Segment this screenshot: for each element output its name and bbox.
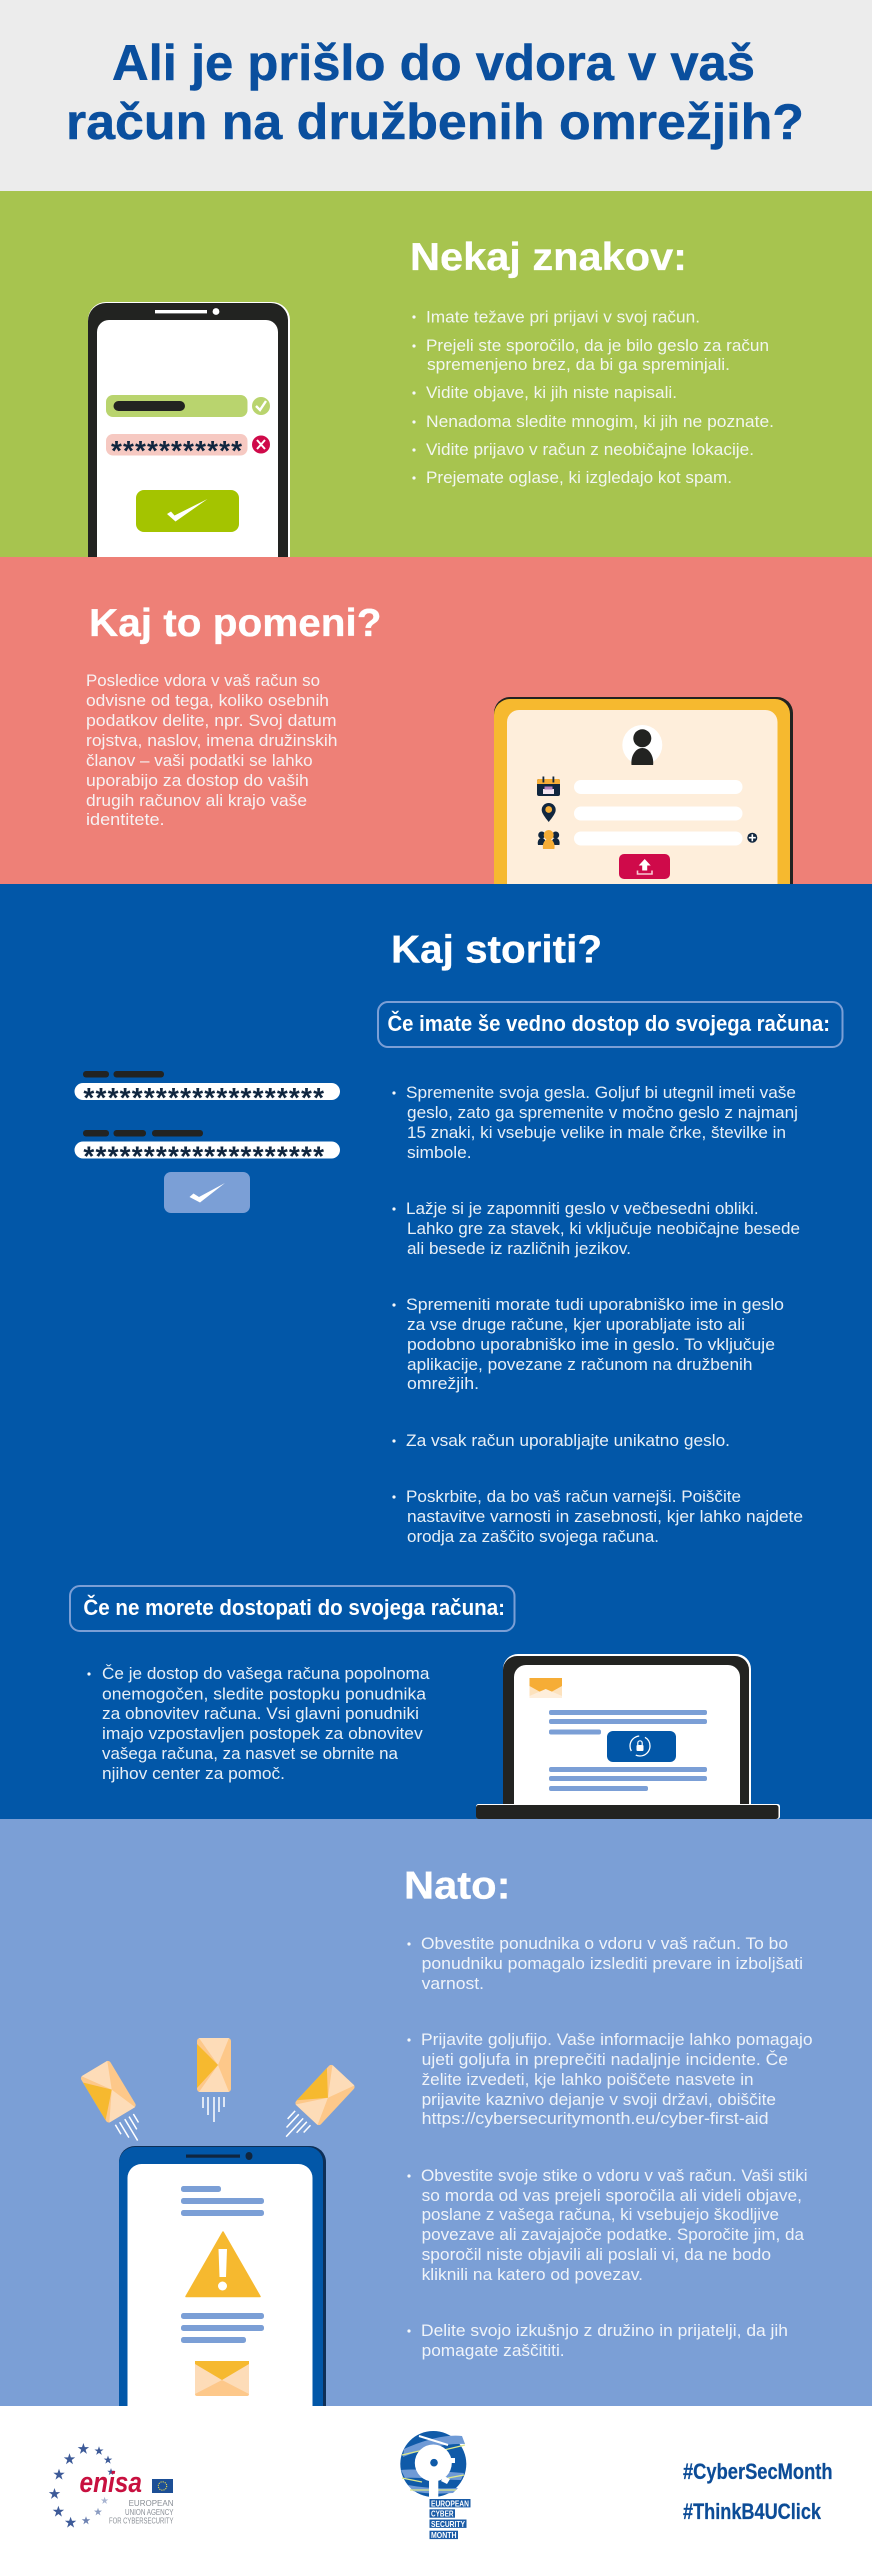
icon: location pin: [542, 803, 556, 822]
list: password advice: aplikacije, povezane z računom na družbenih: [407, 1356, 752, 1374]
confirm button: [136, 490, 239, 532]
list: signs: Prejemate oglase, ki izgledajo kot spam.: [426, 469, 732, 487]
heading: signs: Nekaj znakov:: [410, 236, 687, 279]
text: consequences: rojstva, naslov, imena družinskih: [86, 732, 338, 750]
title: [66, 35, 804, 150]
logo: european cyber security month: MONTH: [431, 2530, 456, 2540]
list: password advice: ali besede iz različnih jezikov.: [407, 1240, 631, 1258]
title: račun na družbenih omrežjih?: [66, 94, 804, 150]
heading: afterwards: Nato:: [404, 1864, 510, 1908]
panel: afterwards: [0, 1819, 872, 2406]
avatar: [622, 725, 662, 765]
hashtags: [683, 2459, 833, 2524]
icon: envelope: [530, 1678, 562, 1698]
list: password advice: Lahko gre za stavek, ki vključuje neobičajne besede: [407, 1220, 800, 1238]
text: account recovery: onemogočen, sledite postopku ponudnika: [102, 1686, 427, 1704]
list: follow-up steps: Prijavite goljufijo. Vaše informacije lahko pomagajo: [421, 2031, 813, 2049]
text: consequences: odvisne od tega, koliko osebnih: [86, 692, 329, 710]
logo: european cyber security month: EUROPEAN: [431, 2498, 469, 2508]
list: signs: Nenadoma sledite mnogim, ki jih ne poznate.: [426, 413, 774, 431]
list: signs: spremenjeno brez, da bi ga spreminjali.: [427, 356, 730, 374]
list: signs: Vidite objave, ki jih niste napisali.: [426, 384, 677, 402]
password field: ***********: [111, 435, 242, 466]
icon: flying envelope left: [80, 2060, 152, 2149]
list: signs: Prejeli ste sporočilo, da je bilo geslo za račun: [426, 337, 769, 355]
logo: european cyber security month: [400, 2431, 470, 2540]
hashtags: #CyberSecMonth: [683, 2459, 833, 2484]
list: follow-up steps: povezave ali zavajajoče podatke. Sporočite jim, da: [422, 2226, 805, 2244]
text: consequences: podatkov delite, npr. Svoj datum: [86, 712, 336, 730]
list: follow-up steps: https://cybersecuritymonth.eu/cyber-first-aid: [422, 2110, 769, 2128]
list: password advice: Lažje si je zapomniti geslo v večbesedni obliki.: [406, 1200, 759, 1218]
heading: what to do: Kaj storiti?: [391, 928, 602, 972]
text: account recovery: imajo vzpostavljen postopek za obnovitev: [102, 1725, 423, 1743]
panel: title header: [0, 0, 872, 191]
panel: signs: [0, 191, 872, 557]
text: account recovery: njihov center za pomoč.: [102, 1765, 285, 1783]
illustration: password form: ********************: [83, 1140, 324, 1172]
list: password advice: [392, 1084, 803, 1546]
list: follow-up steps: poslane z vašega računa, ki vsebujejo škodljive: [422, 2206, 779, 2224]
icon: flying envelope right: [274, 2064, 356, 2148]
logo: enisa: enisa: [80, 2467, 142, 2499]
illustration: password form: ********************: [83, 1082, 324, 1113]
logo: european cyber security month: CYBER: [431, 2509, 454, 2519]
logo: enisa: UNION AGENCY: [125, 2508, 174, 2517]
list: follow-up steps: Obvestite svoje stike o vdoru v vaš račun. Vaši stiki: [421, 2167, 808, 2185]
upload button: [619, 854, 670, 879]
icon: family: [538, 830, 560, 849]
list: follow-up steps: kliknili na katero od povezav.: [422, 2266, 643, 2284]
list: follow-up steps: ujeti goljufa in preprečiti nadaljnje incidente. Če: [422, 2050, 788, 2069]
illustration: phone login: [88, 302, 290, 557]
list: password advice: podobno uporabniško ime in geslo. To vključuje: [407, 1336, 775, 1354]
text: account recovery: za obnovitev računa. Vsi glavni ponudniki: [102, 1705, 419, 1723]
title: Ali je prišlo do vdora v vaš: [112, 35, 755, 91]
list: password advice: geslo, zato ga spremenite v močno geslo z najmanj: [407, 1104, 798, 1122]
icon: add: [747, 833, 757, 843]
icon: warning triangle: [186, 2232, 260, 2296]
list: password advice: simbole.: [407, 1144, 472, 1162]
panel: what to do: [0, 884, 872, 1819]
text: consequences: članov – vaši podatki se lahko: [86, 752, 313, 770]
panel: what it means: [0, 557, 872, 884]
text: consequences: identitete.: [86, 811, 165, 829]
icon: envelope: [195, 2361, 249, 2396]
list: password advice: nastavitve varnosti in zasebnosti, kjer lahko najdete: [407, 1508, 803, 1526]
form fields: [574, 780, 742, 846]
list: follow-up steps: sporočil niste objavili ali poslali vi, da ne bodo: [422, 2246, 771, 2264]
logo: european cyber security month: SECURITY: [431, 2519, 465, 2529]
list: password advice: Poskrbite, da bo vaš račun varnejši. Poiščite: [406, 1488, 741, 1506]
list: signs: Vidite prijavo v račun z neobičajne lokacije.: [426, 441, 754, 459]
list: password advice: orodja za zaščito svojega računa.: [407, 1528, 659, 1546]
panel: footer logos: [0, 2406, 872, 2560]
list: follow-up steps: Delite svojo izkušnjo z družino in prijatelji, da jih: [421, 2322, 788, 2340]
text: consequences: Posledice vdora v vaš račun so: [86, 672, 320, 690]
username field: [106, 395, 270, 417]
recovery button: [607, 1731, 676, 1762]
list: follow-up steps: so morda od vas prejeli sporočila ali videli objave,: [422, 2187, 802, 2205]
list: password advice: omrežjih.: [407, 1375, 479, 1393]
subheading box: no access: [70, 1586, 514, 1631]
list: follow-up steps: ponudniku pomagalo izslediti prevare in izboljšati: [422, 1955, 803, 1973]
hashtags: #ThinkB4UClick: [683, 2499, 822, 2524]
list: password advice: Spremenite svoja gesla. Goljuf bi utegnil imeti vaše: [406, 1084, 796, 1102]
heading: what it means: Kaj to pomeni?: [89, 602, 382, 645]
icon: flying envelope centre: [197, 2038, 231, 2122]
text: consequences: [86, 672, 338, 829]
text: consequences: uporabijo za dostop do vaših: [86, 772, 309, 790]
list: follow-up steps: Obvestite ponudnika o vdoru v vaš račun. To bo: [421, 1935, 788, 1953]
list: follow-up steps: želite izvedeti, kje lahko poiščete nasvete in: [422, 2071, 754, 2089]
logo: enisa: [49, 2443, 174, 2528]
illustration: laptop recovery: [476, 1654, 780, 1819]
logo: enisa: EUROPEAN: [129, 2499, 174, 2508]
list: password advice: za vse druge račune, kjer uporabljate isto ali: [407, 1316, 745, 1334]
list: password advice: Spremeniti morate tudi uporabniško ime in geslo: [406, 1296, 784, 1314]
text: account recovery: vašega računa, za nasvet se obrnite na: [102, 1745, 399, 1763]
list: signs: [412, 308, 774, 487]
text: consequences: drugih računov ali krajo vaše: [86, 792, 307, 810]
list: password advice: 15 znaki, ki vsebuje velike in male črke, številke in: [407, 1124, 786, 1142]
illustration: password form: [74, 1071, 340, 1213]
icon: calendar: [537, 776, 560, 796]
list: follow-up steps: [407, 1935, 813, 2360]
illustration: tablet profile form: [494, 697, 793, 884]
logo: enisa: FOR CYBERSECURITY: [109, 2516, 174, 2526]
subheading box: still have access: [378, 1002, 842, 1047]
subheading box: still have access: Če imate še vedno dostop do svojega računa:: [388, 1011, 830, 1036]
list: signs: Imate težave pri prijavi v svoj račun.: [426, 308, 700, 326]
list: follow-up steps: prijavite kaznivo dejanje v svoji državi, obiščite: [422, 2091, 776, 2109]
list: follow-up steps: pomagate zaščititi.: [422, 2342, 565, 2360]
text: account recovery: [87, 1664, 430, 1783]
text: account recovery: Če je dostop do vašega računa popolnoma: [102, 1664, 430, 1683]
list: follow-up steps: varnost.: [422, 1975, 484, 1993]
list: password advice: Za vsak račun uporabljajte unikatno geslo.: [406, 1432, 730, 1450]
subheading box: no access: Če ne morete dostopati do svojega računa:: [83, 1595, 505, 1620]
illustration: phone warning: [119, 2146, 326, 2406]
